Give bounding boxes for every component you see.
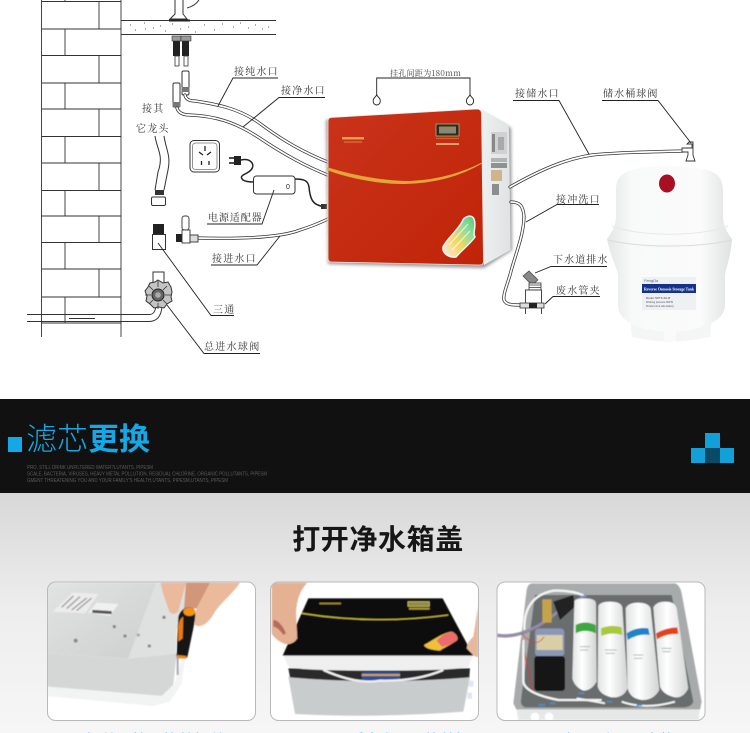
small English text: PRO, STILL DRINK UNFILTERED WATER?LUTANTS, PIPESM: [27, 465, 153, 471]
main water pipe: [27, 306, 162, 322]
dimension: hook spacing: 挂孔间距为180mm: [390, 68, 461, 79]
label: other faucet: [136, 100, 170, 135]
tank ball valve: [682, 142, 695, 161]
flush pipe: [504, 202, 524, 305]
lower section background: [0, 493, 750, 733]
tee fitting: [152, 224, 166, 250]
label: flush port: 接冲洗口: [556, 191, 601, 206]
label: inlet port: [211, 236, 280, 265]
small English text: SCALE, BACTERIA, VIRUSES, HEAVY METAL POLLUTION, RESIDUAL CHLORINE, ORGANIC POLLUTANTS, PIPESM: [27, 472, 267, 478]
label: power adapter: 电源适配器: [208, 209, 262, 224]
label: storage water port: 接储水口: [515, 85, 560, 100]
small English text: [27, 465, 267, 484]
under-counter connectors: [172, 36, 191, 66]
icon: wall socket: [190, 140, 220, 172]
tank label: [642, 277, 696, 310]
icon: blue mosaic squares: [691, 433, 734, 463]
pipe fittings: [172, 71, 190, 107]
label: tank ball valve: 储水桶球阀: [603, 85, 658, 100]
photo card 1: unscrew: [47, 582, 255, 720]
side label stickers: [491, 132, 507, 195]
label: tank ball valve: [602, 85, 691, 143]
pure water pipe: [185, 95, 330, 163]
tank label: Reverse Osmosis Storage Tank: [644, 286, 695, 292]
label: pure water port: 接纯水口: [234, 63, 279, 78]
countertop with faucet base: [121, 0, 276, 34]
main ball valve: [145, 272, 172, 309]
power adapter with cords: 0: [286, 184, 290, 191]
hologram sticker: [443, 216, 475, 257]
photo card 2: lift the lid: [270, 582, 478, 720]
label: clean water port: [243, 82, 326, 127]
inlet pipe with valve: [176, 216, 330, 243]
hose to other faucet: [152, 136, 169, 206]
tank label: Product shut safe battery: [646, 305, 675, 308]
label: sewer drain: 下水道排水: [553, 251, 608, 266]
label: main ball valve: 总进水球阀: [204, 338, 260, 353]
label: sewer drain: [535, 251, 608, 273]
red cap: [659, 174, 675, 192]
display panel: [436, 124, 459, 145]
label: main ball valve: [167, 305, 260, 354]
heading: filter replacement: 更换: [88, 414, 150, 459]
drain saddle: [520, 271, 544, 314]
label: other faucet: 它龙头: [136, 120, 170, 135]
icon: left hook hole: [373, 95, 380, 105]
photo card 3: open filters: [497, 582, 705, 721]
label: waste water clamp: [545, 282, 601, 304]
label: other faucet: 接其: [142, 100, 164, 115]
brand mark: [342, 137, 364, 142]
power adapter with cords: [229, 156, 327, 209]
tank label: Model: NPTK-3G-B: [646, 296, 670, 300]
label: tee: [158, 243, 235, 316]
label: waste water clamp: 废水管夹: [556, 282, 601, 297]
water purifier unit: [326, 109, 512, 268]
icon: right hook hole: [466, 95, 474, 105]
label: tee: 三通: [213, 301, 235, 316]
small English text: GMENT THREATENING YOU AND YOUR FAMILY'S HEALTH,UTANTS, PIPESM,UTANTS, PIPESM: [27, 478, 228, 484]
heading: filter replacement: [8, 414, 150, 459]
hand: [161, 583, 240, 626]
section header band: [0, 399, 750, 493]
label: power adapter: [207, 190, 274, 224]
tank label: FengDa: [644, 278, 659, 283]
title: open the purifier lid: 打开净水箱盖: [292, 518, 464, 558]
heading: filter replacement: 滤芯: [26, 414, 88, 459]
label: pure water port: [218, 63, 279, 106]
brick wall: [42, 0, 121, 337]
storage water pipe: [510, 151, 683, 187]
gold swoosh: [328, 163, 482, 184]
tank label: Working pressure 80PSI: [646, 301, 673, 304]
label: storage water port: [513, 85, 590, 156]
label: inlet port: 接进水口: [212, 250, 257, 265]
clean water pipe: [177, 108, 330, 176]
filter cartridges: [572, 598, 688, 700]
label: clean water port: 接净水口: [281, 82, 326, 97]
dimension: hook spacing: [377, 68, 470, 96]
label: flush port: [526, 191, 601, 222]
storage tank: [607, 166, 732, 342]
